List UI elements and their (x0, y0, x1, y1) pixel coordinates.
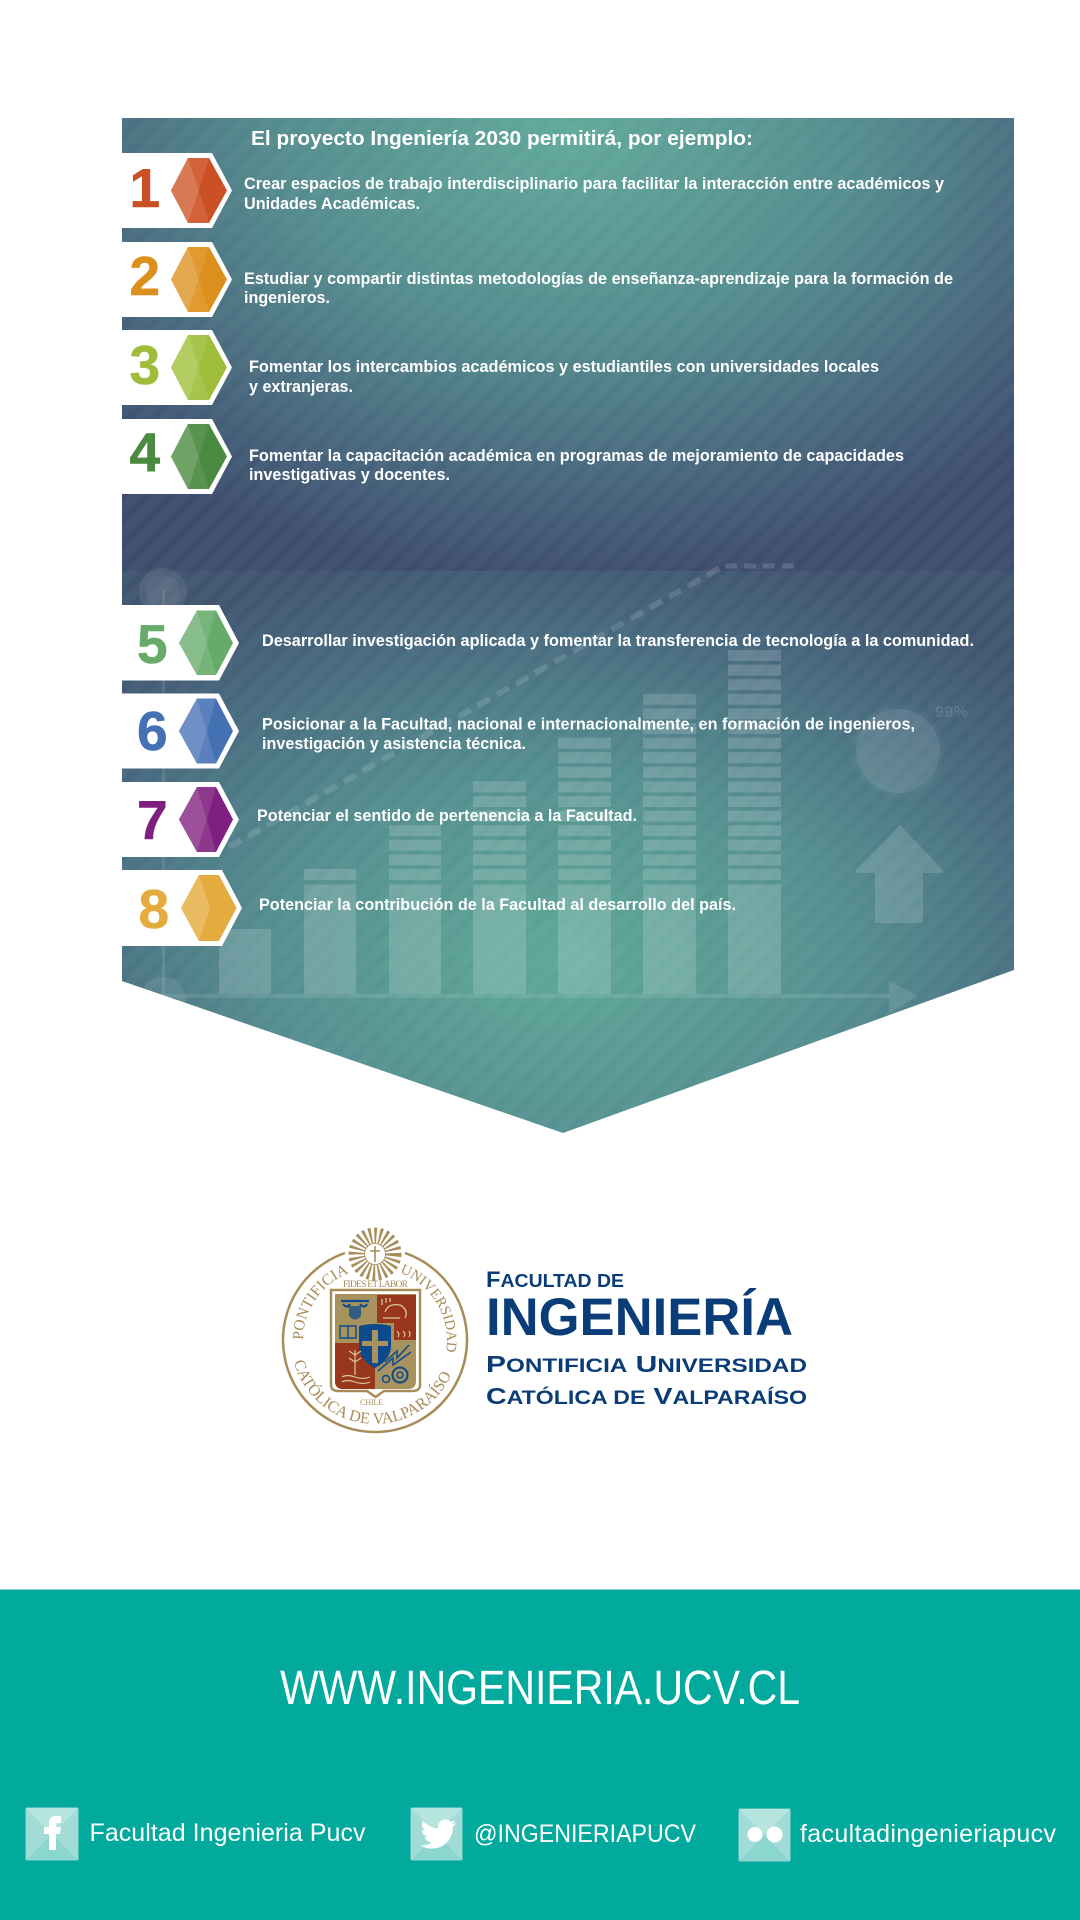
logo: university seal: CATÓLICA DE VALPARAÍSO (295, 1360, 450, 1424)
social: facebook name: Facultad Ingenieria Pucv (90, 1819, 366, 1847)
icon: flickr (738, 1808, 790, 1862)
item 8: Potenciar la contribución de la Facultad al desarrollo del país. (259, 896, 736, 914)
logo: university seal: PONTIFICIA (292, 1266, 349, 1340)
item 8: 8 (138, 878, 169, 940)
chart: background bar chart (139, 566, 968, 1023)
logo: university seal: CHILE (360, 1398, 383, 1407)
item 5: Desarrollar investigación aplicada y fomentar la transferencia de tecnología a la comunidad. (262, 632, 974, 650)
item 7 (122, 782, 637, 857)
logo: faculty name: FACULTAD DE (486, 1267, 624, 1292)
social: flickr name: facultadingenieriapucv (800, 1820, 1056, 1848)
item 5: 5 (137, 613, 168, 675)
item 1: 1 (130, 157, 160, 219)
item 3: 3 (130, 334, 160, 396)
item 2: Estudiar y compartir distintas metodologías de enseñanza-aprendizaje para la formación de (244, 270, 953, 288)
item 7: 7 (137, 789, 168, 851)
item 1 (122, 153, 945, 228)
logo: faculty name (486, 1267, 807, 1409)
social: twitter handle: @INGENIERIAPUCV (474, 1820, 696, 1848)
item 3: Fomentar los intercambios académicos y estudiantiles con universidades locales (249, 358, 879, 376)
logo: faculty name: INGENIERÍA (486, 1287, 793, 1347)
item 6: investigación y asistencia técnica. (262, 735, 526, 753)
panel: main arrow banner (122, 118, 1014, 1138)
item 2: 2 (130, 245, 160, 307)
logo: university seal: FIDES ET LABOR (343, 1280, 409, 1290)
item 7: Potenciar el sentido de pertenencia a la Facultad. (257, 807, 637, 825)
item 1: Unidades Académicas. (244, 195, 420, 213)
item 4 (122, 419, 904, 494)
logo: university seal: UNIVERSIDAD (402, 1264, 456, 1352)
item 6: Posicionar a la Facultad, nacional e internacionalmente, en formación de ingenieros, (262, 716, 915, 734)
website url: WWW.INGENIERIA.UCV.CL (280, 1662, 800, 1715)
item 2: ingenieros. (244, 289, 330, 307)
icon: facebook (26, 1808, 78, 1860)
item 4: investigativas y docentes. (249, 466, 450, 484)
item 5 (122, 605, 974, 680)
item 3 (122, 330, 879, 405)
heading: El proyecto Ingeniería 2030 permitirá, por ejemplo: (251, 127, 753, 150)
item 8 (122, 870, 736, 946)
item 4: Fomentar la capacitación académica en programas de mejoramiento de capacidades (249, 447, 904, 465)
item 2 (122, 242, 953, 317)
logo: faculty name: CATÓLICA DE V ALPARAÍSO (486, 1383, 807, 1409)
item 3: y extranjeras. (249, 378, 353, 396)
item 6: 6 (137, 700, 168, 762)
logo: university seal (282, 1228, 468, 1434)
logo: faculty name: PONTIFICIA U NIVERSIDAD (486, 1351, 807, 1377)
chart: background bar chart: 99% (935, 704, 968, 721)
item 4: 4 (130, 421, 160, 483)
footer band (0, 1590, 1080, 1920)
icon: twitter (410, 1808, 462, 1860)
item 1: Crear espacios de trabajo interdisciplinario para facilitar la interacción entre académicos y (244, 175, 945, 193)
item 6 (122, 694, 915, 768)
